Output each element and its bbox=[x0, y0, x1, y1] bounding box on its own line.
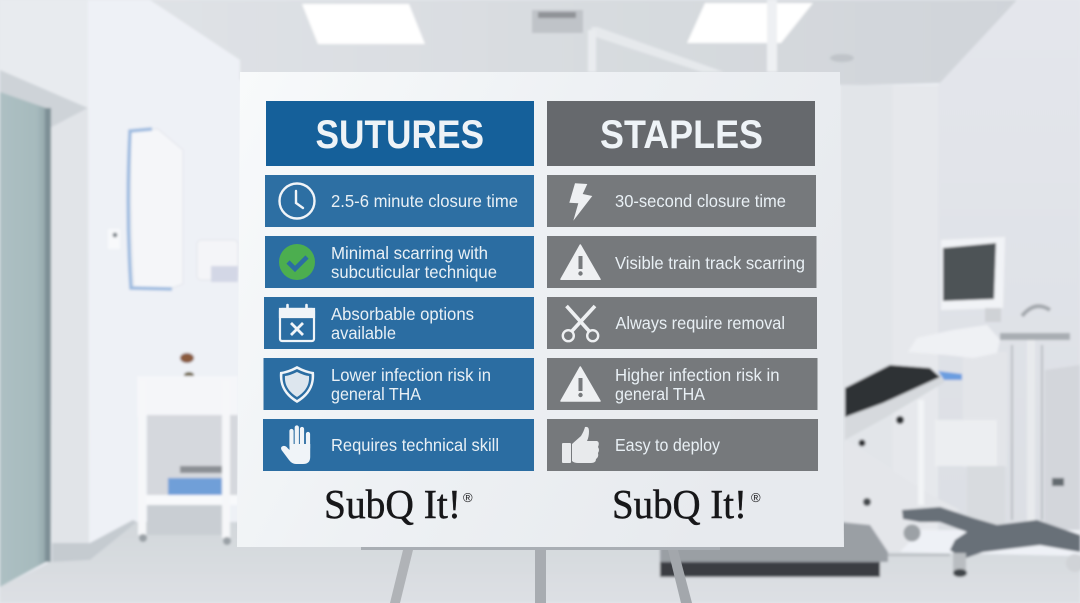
row: closure time: 30-second closure time bbox=[615, 191, 786, 211]
icon: thumbs up bbox=[562, 427, 599, 463]
icon: clock bbox=[280, 184, 314, 218]
right walls bbox=[840, 85, 893, 540]
icon: lightning bolt bbox=[569, 183, 592, 221]
icon: warning triangle bbox=[561, 367, 600, 401]
logo: SubQ It! left: ® bbox=[463, 490, 473, 505]
ceiling bbox=[150, 0, 1017, 85]
row: scarring: subcuticular technique bbox=[331, 262, 497, 282]
row: closure time: 2.5-6 minute closure time bbox=[331, 191, 518, 211]
icon: hand bbox=[281, 428, 310, 464]
row: absorbable bbox=[264, 297, 534, 349]
row: absorbable: available bbox=[331, 323, 396, 343]
row: removal bbox=[547, 297, 817, 349]
row: scarring bbox=[265, 236, 534, 288]
heading: staples: STAPLES bbox=[600, 113, 763, 157]
easel bbox=[361, 546, 720, 603]
row: lower infection risk: Lower infection risk in bbox=[331, 365, 491, 385]
ultrasound machine bbox=[941, 237, 1005, 310]
heading: sutures bbox=[266, 101, 534, 166]
panel: staples column bbox=[547, 101, 818, 527]
heading: sutures: SUTURES bbox=[316, 113, 484, 157]
lamp arm bbox=[591, 27, 724, 72]
icon: warning triangle bbox=[561, 245, 600, 279]
logo: SubQ It! right: SubQ It! bbox=[612, 481, 747, 527]
icon: green check bbox=[279, 244, 315, 280]
row: absorbable: Absorbable options bbox=[331, 304, 474, 324]
row: easy to deploy: Easy to deploy bbox=[615, 435, 720, 455]
row: lower infection risk: general THA bbox=[331, 384, 421, 404]
row: lower infection risk bbox=[264, 358, 534, 410]
logo: SubQ It! right: ® bbox=[751, 490, 761, 505]
heading: staples bbox=[547, 101, 815, 166]
cart bbox=[180, 353, 194, 363]
panel: comparison board bbox=[237, 72, 844, 547]
left wall and door bbox=[0, 0, 88, 108]
row: higher infection risk: general THA bbox=[615, 384, 705, 404]
row: closure time bbox=[547, 175, 816, 227]
icon: calendar with x bbox=[280, 305, 314, 341]
row: higher infection risk: Higher infection risk in bbox=[615, 365, 780, 385]
logo: SubQ It! left: SubQ It! bbox=[324, 481, 461, 527]
easel base bbox=[660, 522, 888, 562]
row: closure time bbox=[265, 175, 534, 227]
row: technical skill bbox=[263, 419, 534, 471]
panel: sutures column bbox=[263, 101, 534, 527]
row: higher infection risk bbox=[547, 358, 818, 410]
row: scarring: Visible train track scarring bbox=[615, 253, 805, 273]
ceiling lights and vent bbox=[302, 4, 425, 44]
icon: shield bbox=[280, 366, 314, 403]
machine base bbox=[902, 507, 1080, 559]
floor bbox=[0, 522, 1080, 603]
wall dispenser bbox=[131, 129, 183, 288]
row: scarring bbox=[547, 236, 816, 288]
icon: scissors bbox=[563, 306, 598, 341]
row: removal: Always require removal bbox=[616, 313, 785, 333]
row: scarring: Minimal scarring with bbox=[331, 243, 488, 263]
row: easy to deploy bbox=[547, 419, 818, 471]
procedure bed bbox=[845, 377, 945, 440]
row: technical skill: Requires technical skill bbox=[331, 435, 499, 455]
